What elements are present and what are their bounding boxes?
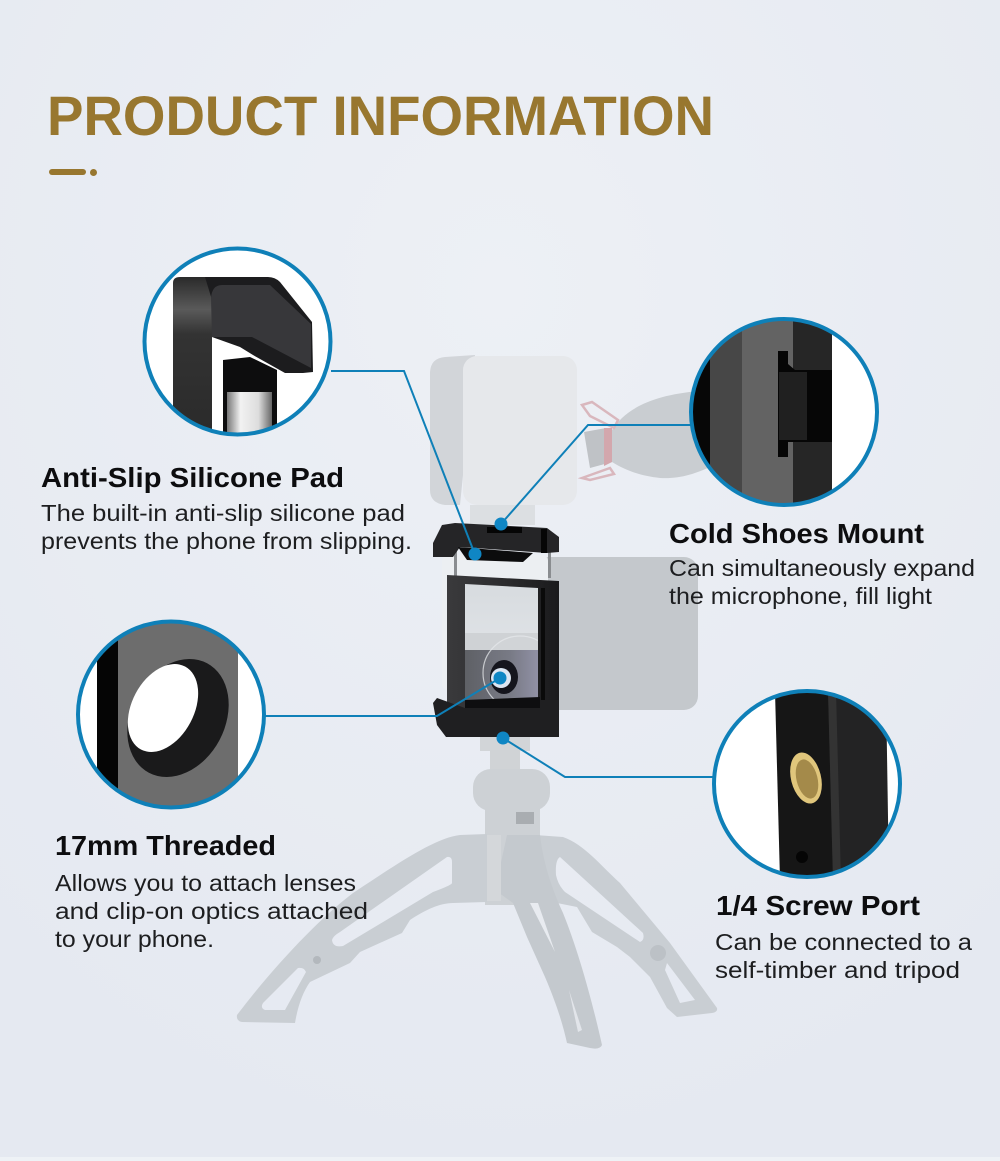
clear phone edge and glass <box>442 555 548 690</box>
faded fill light <box>430 355 577 525</box>
text: 1/4 screw port <box>715 890 973 983</box>
tripod details <box>313 812 666 1032</box>
callout lines <box>264 371 714 777</box>
clamp rods <box>454 550 551 578</box>
suction ring <box>483 636 557 710</box>
text: 1/4 screw port: 1/4 Screw Port <box>716 890 920 921</box>
faded tripod <box>237 737 717 1049</box>
heading block <box>47 84 714 176</box>
text: cold shoes mount: Cold Shoes Mount <box>669 518 924 549</box>
text: cold shoes mount: Can simultaneously expand <box>669 555 975 581</box>
text: cold shoes mount <box>669 518 975 609</box>
text: anti-slip silicone pad: prevents the phone from slipping. <box>41 528 412 554</box>
panel: screw port close-up <box>714 691 900 880</box>
close-up silicone pad artwork <box>173 277 313 440</box>
panel: silicone pad close-up <box>144 248 330 440</box>
silicone pad <box>458 547 533 562</box>
shoe slot <box>487 527 522 533</box>
clamp body frame <box>447 575 559 737</box>
top jaw <box>433 523 559 557</box>
text: anti-slip silicone pad: Anti-Slip Silicone Pad <box>41 462 344 493</box>
tripod right leg <box>535 835 717 1017</box>
text: 17mm threaded: Allows you to attach lenses <box>55 870 356 896</box>
phone lens <box>490 660 518 694</box>
text: 1/4 screw port: Can be connected to a <box>715 929 973 955</box>
faded phone <box>530 557 698 710</box>
bottom edge strip <box>0 1157 1000 1161</box>
mounting plate <box>465 650 540 700</box>
close-up screw port artwork <box>775 691 889 880</box>
tripod head <box>473 737 550 905</box>
close-up threaded artwork <box>97 624 238 806</box>
title: PRODUCT INFORMATION <box>47 84 714 147</box>
text: 17mm threaded: and clip-on optics attached <box>55 898 368 924</box>
panel: threaded close-up <box>78 615 264 815</box>
top jaw highlight <box>541 529 547 553</box>
bottom jaw <box>433 698 559 737</box>
tripod left leg <box>237 834 487 1023</box>
lower bar wedge <box>465 697 540 708</box>
title accent dash <box>49 169 97 176</box>
phone clamp <box>433 523 559 737</box>
text: cold shoes mount: the microphone, fill light <box>669 583 932 609</box>
text: 17mm threaded: 17mm Threaded <box>55 830 276 861</box>
right rail highlight <box>541 588 545 734</box>
text: anti-slip silicone pad: The built-in anti-slip silicone pad <box>41 500 405 526</box>
line: threaded <box>264 678 500 716</box>
line: screw port <box>503 738 714 777</box>
line: cold shoe <box>501 425 691 524</box>
line: silicone pad <box>331 371 474 552</box>
glass panel <box>465 583 538 705</box>
text: 17mm threaded <box>55 830 368 952</box>
faded microphone <box>582 385 730 480</box>
close-up cold shoe artwork <box>691 319 832 505</box>
text: anti-slip silicone pad <box>41 462 412 554</box>
tripod front leg <box>495 835 602 1049</box>
panel: cold shoe close-up <box>691 319 877 505</box>
callout dots <box>468 518 510 744</box>
text: 17mm threaded: to your phone. <box>55 926 214 952</box>
product illustration <box>237 355 730 1049</box>
text: 1/4 screw port: self-timber and tripod <box>715 957 960 983</box>
